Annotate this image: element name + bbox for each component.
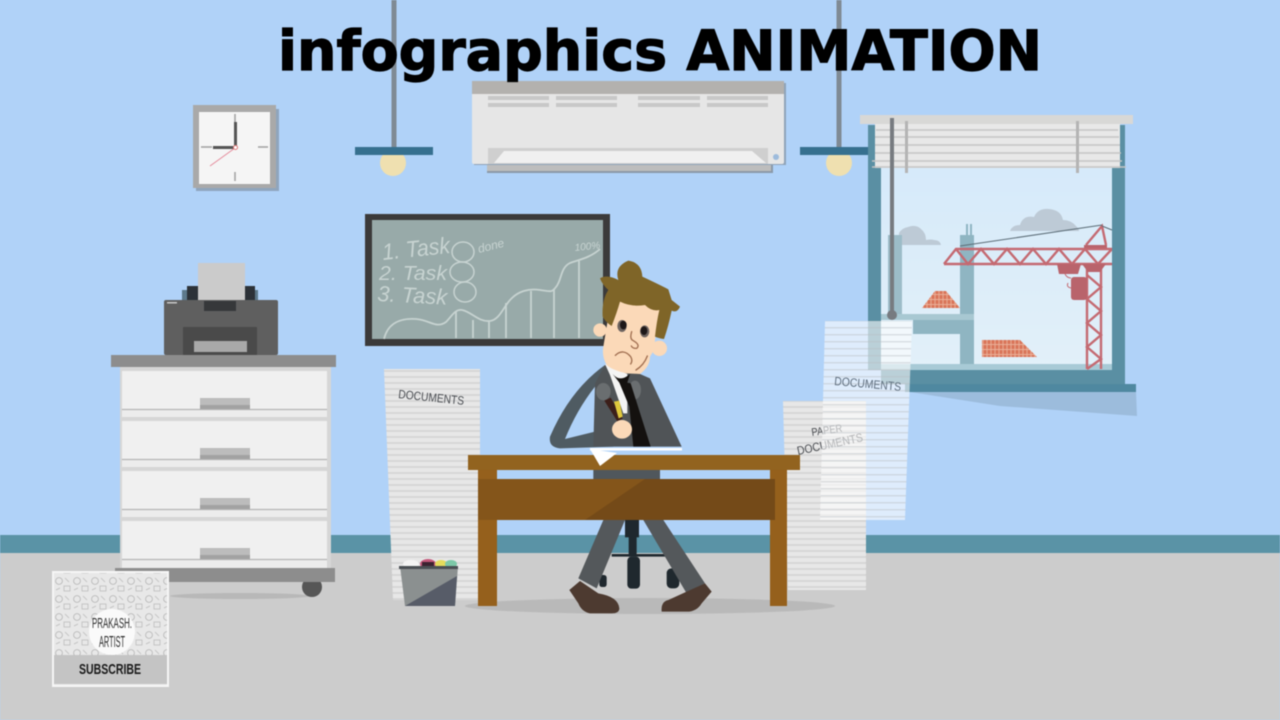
wall clock bbox=[193, 105, 279, 191]
concrete building structure bbox=[881, 224, 1112, 370]
floor bbox=[0, 553, 1280, 720]
left eye bbox=[617, 320, 627, 332]
left ceiling lamp bbox=[355, 0, 433, 176]
jacket highlights bbox=[596, 381, 641, 400]
tie bbox=[613, 374, 651, 447]
chalk task circles bbox=[450, 242, 476, 302]
window pane bbox=[881, 166, 1112, 366]
back right document stack bbox=[783, 401, 866, 590]
front translucent document stack bbox=[820, 321, 912, 520]
right eye bbox=[640, 325, 649, 337]
chalk task list: 1. Task bbox=[381, 232, 453, 265]
window frame bbox=[868, 125, 1125, 384]
character and chair bbox=[550, 261, 712, 613]
office chair bbox=[599, 520, 679, 589]
chalk task list: done bbox=[476, 236, 506, 256]
chalkboard bbox=[365, 214, 610, 346]
jacket bbox=[593, 365, 682, 447]
subscribe badge: ARTIST bbox=[99, 634, 125, 651]
stack label: DOCUMENTS bbox=[834, 374, 902, 394]
right ceiling lamp bbox=[799, 0, 869, 176]
trousers bbox=[578, 470, 705, 593]
chalk task list: 2. Task bbox=[378, 263, 448, 285]
window sill bbox=[905, 384, 1136, 392]
wastebasket bbox=[399, 559, 458, 606]
writing hand bbox=[612, 420, 632, 439]
blind cord bbox=[887, 118, 897, 320]
stack label: DOCUMENTS bbox=[398, 387, 465, 408]
chalk growth chart bbox=[384, 249, 600, 339]
left shoe bbox=[569, 581, 619, 613]
left arm bbox=[550, 365, 613, 448]
window bbox=[860, 115, 1137, 416]
channel name: PRAKASH. bbox=[92, 615, 132, 632]
air conditioner bbox=[472, 81, 786, 173]
printer bbox=[164, 263, 278, 355]
pen tip bbox=[614, 401, 623, 418]
floor shadow under desk bbox=[465, 598, 835, 614]
subscribe badge bbox=[52, 571, 169, 687]
chalk task list: 100% bbox=[574, 240, 601, 254]
pen bbox=[604, 398, 623, 421]
face bbox=[603, 297, 662, 374]
baseboard bbox=[0, 535, 1280, 553]
tower crane bbox=[944, 225, 1112, 369]
blinds bbox=[860, 115, 1133, 173]
hair bbox=[600, 261, 680, 339]
subscribe label: SUBSCRIBE bbox=[79, 661, 141, 678]
brick piles bbox=[922, 291, 1037, 357]
shirt collar bbox=[605, 364, 627, 413]
title: infographics ANIMATION bbox=[278, 19, 1042, 83]
sill shadow bbox=[910, 392, 1137, 416]
chalk task list bbox=[377, 232, 601, 310]
stack label: documents: DOCUMENTS bbox=[796, 430, 864, 458]
left document stack bbox=[384, 369, 480, 600]
paper on desk bbox=[590, 448, 682, 466]
ears bbox=[593, 323, 607, 337]
right shoe bbox=[662, 583, 712, 612]
filing cabinet bbox=[111, 355, 336, 599]
desk bbox=[468, 455, 800, 606]
wall background bbox=[0, 0, 1280, 535]
clouds bbox=[899, 209, 1079, 245]
chalk task list: 3. Task bbox=[377, 281, 449, 310]
drawer handles bbox=[200, 398, 250, 559]
stack label: paper: PAPER bbox=[811, 423, 843, 439]
nose and mouth bbox=[615, 332, 647, 370]
